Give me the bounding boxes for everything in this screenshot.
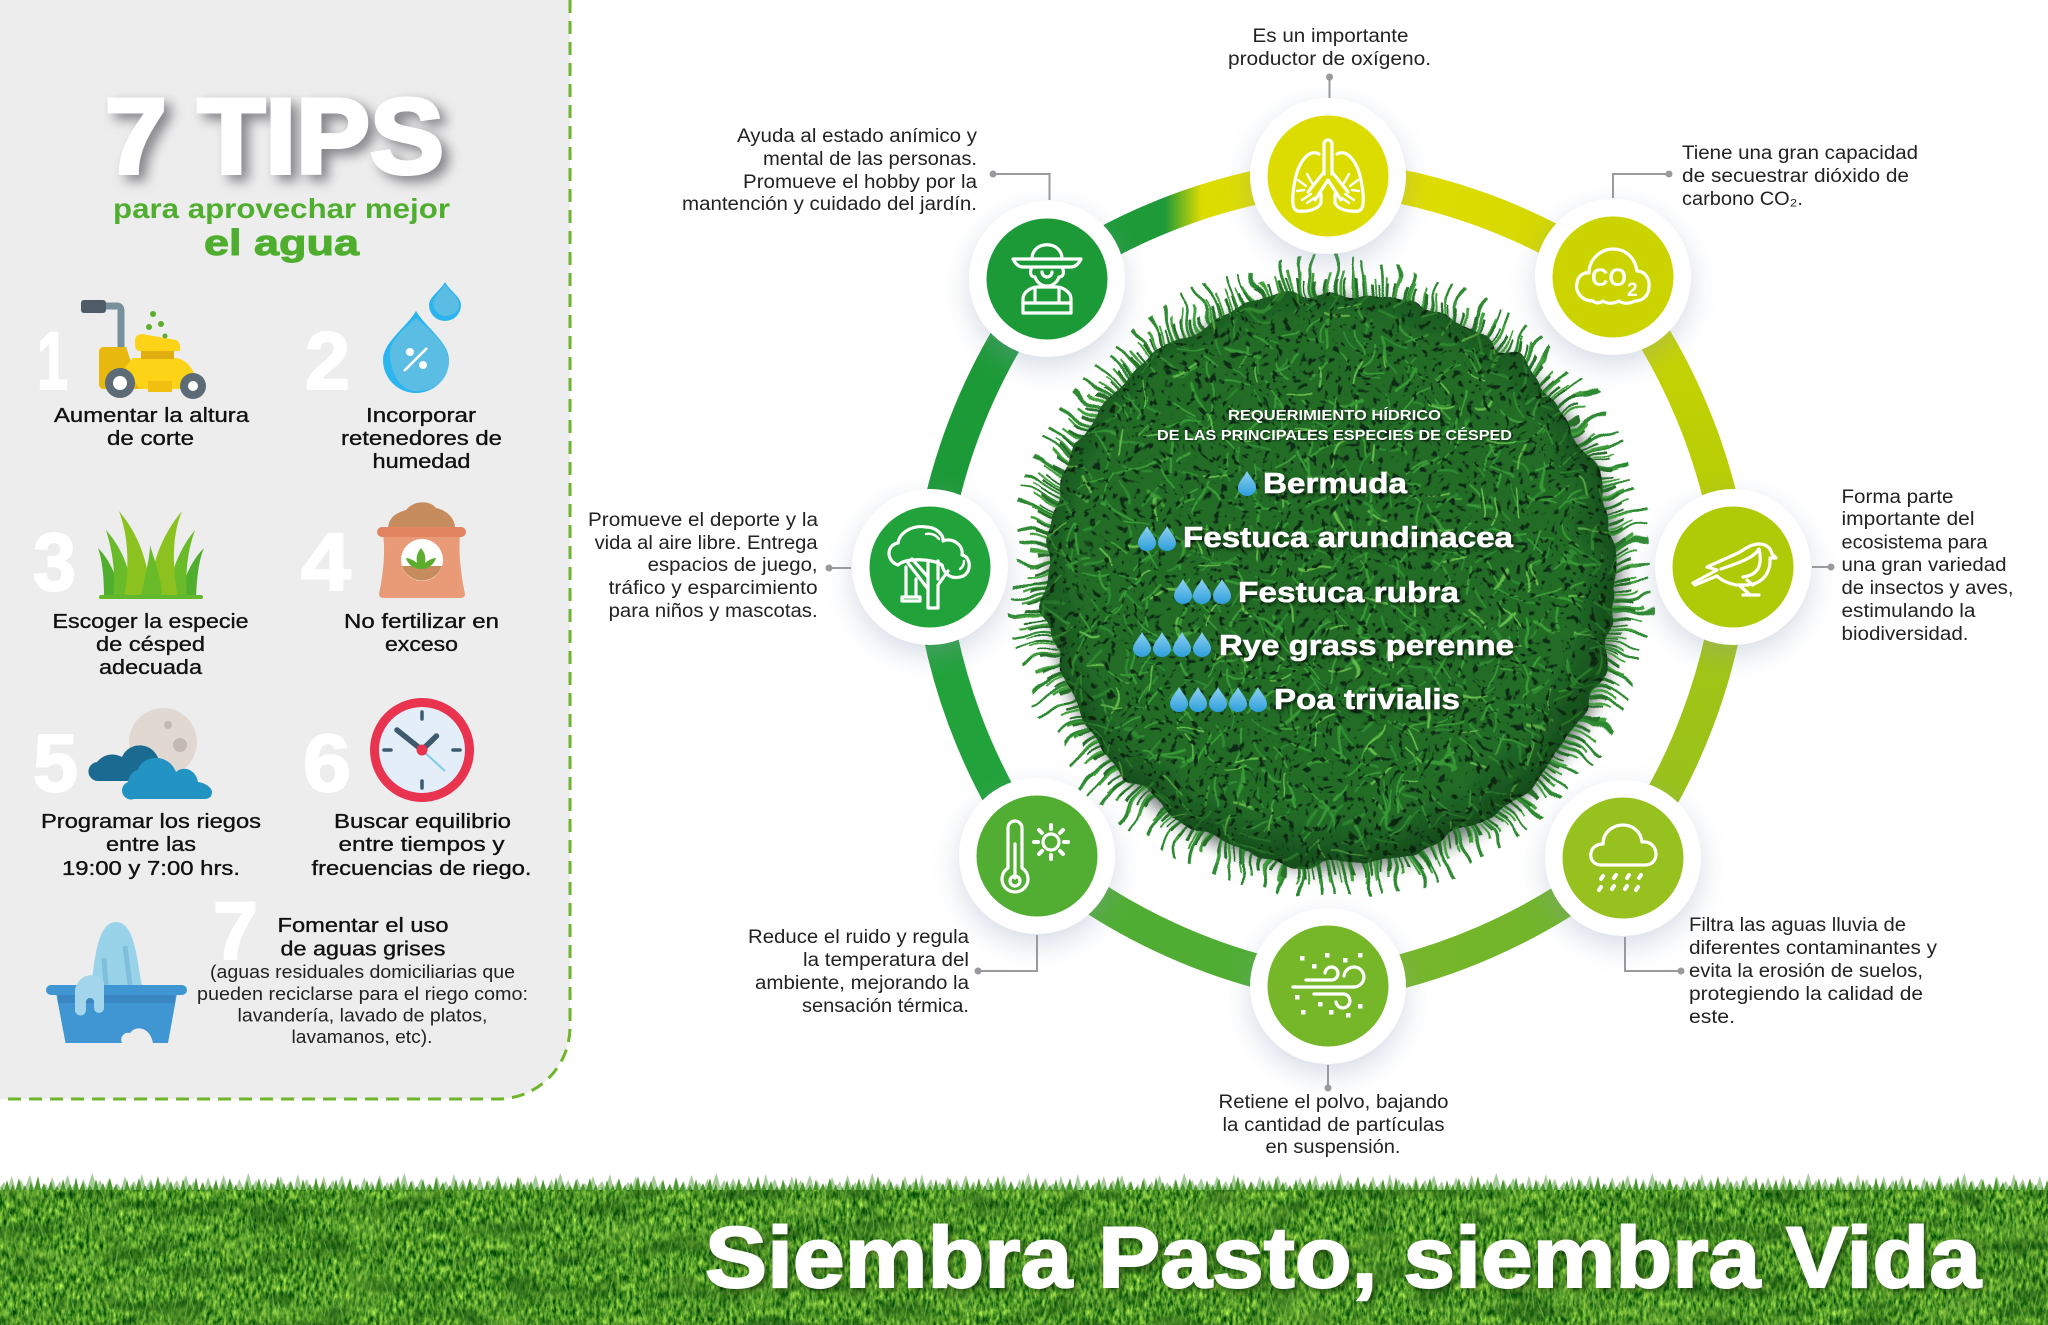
footer: grass band xyxy=(0,1173,2048,1325)
label: oxygen: Es un importante xyxy=(1252,26,1408,47)
tip 2: water drop: retenedores de xyxy=(341,428,502,450)
label: noise and temperature: sensación térmica. xyxy=(802,996,969,1017)
icon: lungs xyxy=(1293,140,1363,211)
species: Poa trivialis xyxy=(1170,684,1460,716)
tip 4: fertilizer bag: exceso xyxy=(385,634,458,656)
icon: fertilizer bag xyxy=(377,502,466,598)
tip 5: irrigation schedule xyxy=(33,708,261,880)
label: water filtering: diferentes contaminantes y xyxy=(1689,938,1938,959)
label: biodiversity: biodiversidad. xyxy=(1842,624,1968,645)
slogan: Siembra Pasto, siembra Vida xyxy=(705,1210,1982,1306)
species: Rye grass perenne xyxy=(1133,630,1514,662)
label: sport and outdoors: espacios de juego, xyxy=(648,555,818,576)
icon: water drops with percent xyxy=(383,282,461,393)
tip 5: irrigation schedule: Programar los riegos xyxy=(41,811,261,833)
label: noise and temperature: Reduce el ruido y regula xyxy=(748,927,969,948)
panel: 7 tips background xyxy=(0,0,570,1099)
tip 7: grey water: Fomentar el uso xyxy=(278,915,448,937)
icon: wash tub xyxy=(46,922,187,1043)
icon: lawn mower xyxy=(81,300,206,399)
tip 6: clock: 6 xyxy=(303,718,351,809)
node: farmer xyxy=(969,201,1125,367)
label: carbon capture: Tiene una gran capacidad xyxy=(1682,143,1918,164)
icon: farmer xyxy=(1013,245,1081,313)
label: dust retention: en suspensión. xyxy=(1266,1137,1400,1158)
tip 1: mower: Aumentar la altura xyxy=(54,405,250,427)
label: sport and outdoors: tráfico y esparcimiento xyxy=(609,578,818,599)
label: biodiversity: una gran variedad xyxy=(1842,555,2006,576)
label: biodiversity: importante del xyxy=(1842,509,1974,530)
label: water filtering: evita la erosión de suelos, xyxy=(1689,961,1923,982)
tip 2: water drop: humedad xyxy=(372,451,470,473)
label: mood and hobby: Ayuda al estado anímico y xyxy=(737,126,978,147)
tip 5: irrigation schedule: 19:00 y 7:00 hrs. xyxy=(62,858,240,880)
icon: bird xyxy=(1693,544,1776,595)
tip 6: clock xyxy=(303,698,532,880)
label: noise and temperature: la temperatura del xyxy=(803,950,969,971)
subtitle: el agua xyxy=(204,222,360,263)
tip 5: irrigation schedule: entre las xyxy=(106,834,196,856)
label: biodiversity: de insectos y aves, xyxy=(1842,578,2014,599)
label: biodiversity: Forma parte xyxy=(1842,487,1954,508)
node: wind and dust xyxy=(1250,908,1406,1074)
label: noise and temperature: ambiente, mejorando la xyxy=(755,973,969,994)
label: carbon capture: carbono CO₂. xyxy=(1682,189,1803,210)
species: Bermuda: Bermuda xyxy=(1263,468,1408,500)
tip 7: grey water: 7 xyxy=(213,886,258,977)
icon: rain cloud xyxy=(1591,825,1656,890)
tip 2: water drop: 2 xyxy=(305,316,350,407)
node: rain xyxy=(1545,780,1701,946)
water requirement heading: DE LAS PRINCIPALES ESPECIES DE CÉSPED xyxy=(1157,427,1512,444)
tip 4: fertilizer bag: 4 xyxy=(301,517,351,608)
label: water filtering: este. xyxy=(1689,1007,1735,1028)
icon: moon and clouds xyxy=(88,708,212,800)
icon: CO2 cloud xyxy=(1577,249,1649,303)
tip 7: grey water: pueden reciclarse para el riego como: xyxy=(197,984,528,1004)
label: dust retention xyxy=(1218,1065,1448,1158)
tip 4: fertilizer bag xyxy=(301,502,499,656)
water requirement heading: REQUERIMIENTO HÍDRICO xyxy=(1228,407,1441,424)
species: Rye grass perenne: Rye grass perenne xyxy=(1219,630,1514,662)
tip 1: mower: 1 xyxy=(37,316,68,407)
tip 7: grey water xyxy=(46,886,528,1047)
icon: tree with swing xyxy=(889,527,969,608)
ring of benefits xyxy=(930,176,1733,986)
icon: CO2 cloud: 2 xyxy=(1627,280,1638,301)
icon: wind with particles xyxy=(1293,953,1364,1018)
tip 5: irrigation schedule: 5 xyxy=(33,718,78,809)
label: water filtering: Filtra las aguas lluvia de xyxy=(1689,915,1906,936)
species: Festuca rubra: Festuca rubra xyxy=(1238,577,1460,609)
label: carbon capture xyxy=(1613,143,1918,210)
icon: CO2 cloud: CO xyxy=(1591,264,1627,292)
tip 3: grass species: Escoger la especie xyxy=(52,611,248,633)
label: water filtering xyxy=(1625,915,1938,1028)
label: oxygen: productor de oxígeno. xyxy=(1228,49,1431,70)
tip 2: water drop xyxy=(305,282,502,473)
species: Festuca rubra xyxy=(1174,577,1460,609)
label: oxygen xyxy=(1228,26,1431,98)
node: bird xyxy=(1655,489,1811,655)
label: mood and hobby: mental de las personas. xyxy=(763,149,977,170)
node: temperature xyxy=(959,778,1115,944)
label: sport and outdoors xyxy=(588,510,851,622)
water requirement heading xyxy=(1157,407,1512,444)
tip 2: water drop: Incorporar xyxy=(366,405,476,427)
label: noise and temperature xyxy=(748,927,1037,1017)
tip 3: grass species xyxy=(33,511,248,679)
subtitle: para aprovechar mejor xyxy=(113,193,450,224)
tip 7: grey water: lavandería, lavado de platos, xyxy=(238,1006,488,1026)
tip 7: grey water: (aguas residuales domiciliarias que xyxy=(210,962,515,982)
tip 3: grass species: de césped xyxy=(96,634,205,656)
node: tree xyxy=(852,489,1008,655)
label: mood and hobby: Promueve el hobby por la xyxy=(743,172,977,193)
species: Poa trivialis: Poa trivialis xyxy=(1274,684,1460,716)
tip 1: mower xyxy=(37,300,250,450)
label: sport and outdoors: vida al aire libre. Entrega xyxy=(595,533,818,554)
grass disc xyxy=(1020,260,1650,900)
label: water filtering: protegiendo la calidad de xyxy=(1689,984,1923,1005)
subtitle xyxy=(113,193,450,263)
label: mood and hobby: mantención y cuidado del jardín. xyxy=(682,194,977,215)
tip 6: clock: entre tiempos y xyxy=(338,834,504,856)
icon: thermometer and sun xyxy=(1002,821,1068,892)
label: carbon capture: de secuestrar dióxido de xyxy=(1682,166,1909,187)
tip 3: grass species: adecuada xyxy=(99,657,203,679)
label: dust retention: la cantidad de partículas xyxy=(1222,1115,1444,1136)
tip 3: grass species: 3 xyxy=(33,517,76,608)
tip 6: clock: frecuencias de riego. xyxy=(312,858,532,880)
icon: clock xyxy=(370,698,474,802)
tip 6: clock: Buscar equilibrio xyxy=(334,811,511,833)
tip 1: mower: de corte xyxy=(107,428,194,450)
label: dust retention: Retiene el polvo, bajando xyxy=(1218,1092,1448,1113)
tip 4: fertilizer bag: No fertilizar en xyxy=(344,611,499,633)
label: biodiversity: estimulando la xyxy=(1842,601,1976,622)
tip 7: grey water: lavamanos, etc). xyxy=(292,1027,432,1047)
tip 7: grey water: de aguas grises xyxy=(280,938,446,960)
label: mood and hobby xyxy=(682,126,1050,215)
title: 7 TIPS: 7 TIPS xyxy=(105,76,444,196)
label: sport and outdoors: Promueve el deporte y la xyxy=(588,510,818,531)
label: sport and outdoors: para niños y mascotas. xyxy=(609,601,818,622)
node: lungs / oxygen xyxy=(1250,98,1406,264)
label: biodiversity xyxy=(1812,487,2014,645)
species: Festuca arundinacea: Festuca arundinacea xyxy=(1183,522,1514,554)
icon: grass xyxy=(98,511,204,599)
label: biodiversity: ecosistema para xyxy=(1842,532,1988,554)
node: CO2 xyxy=(1535,199,1691,365)
